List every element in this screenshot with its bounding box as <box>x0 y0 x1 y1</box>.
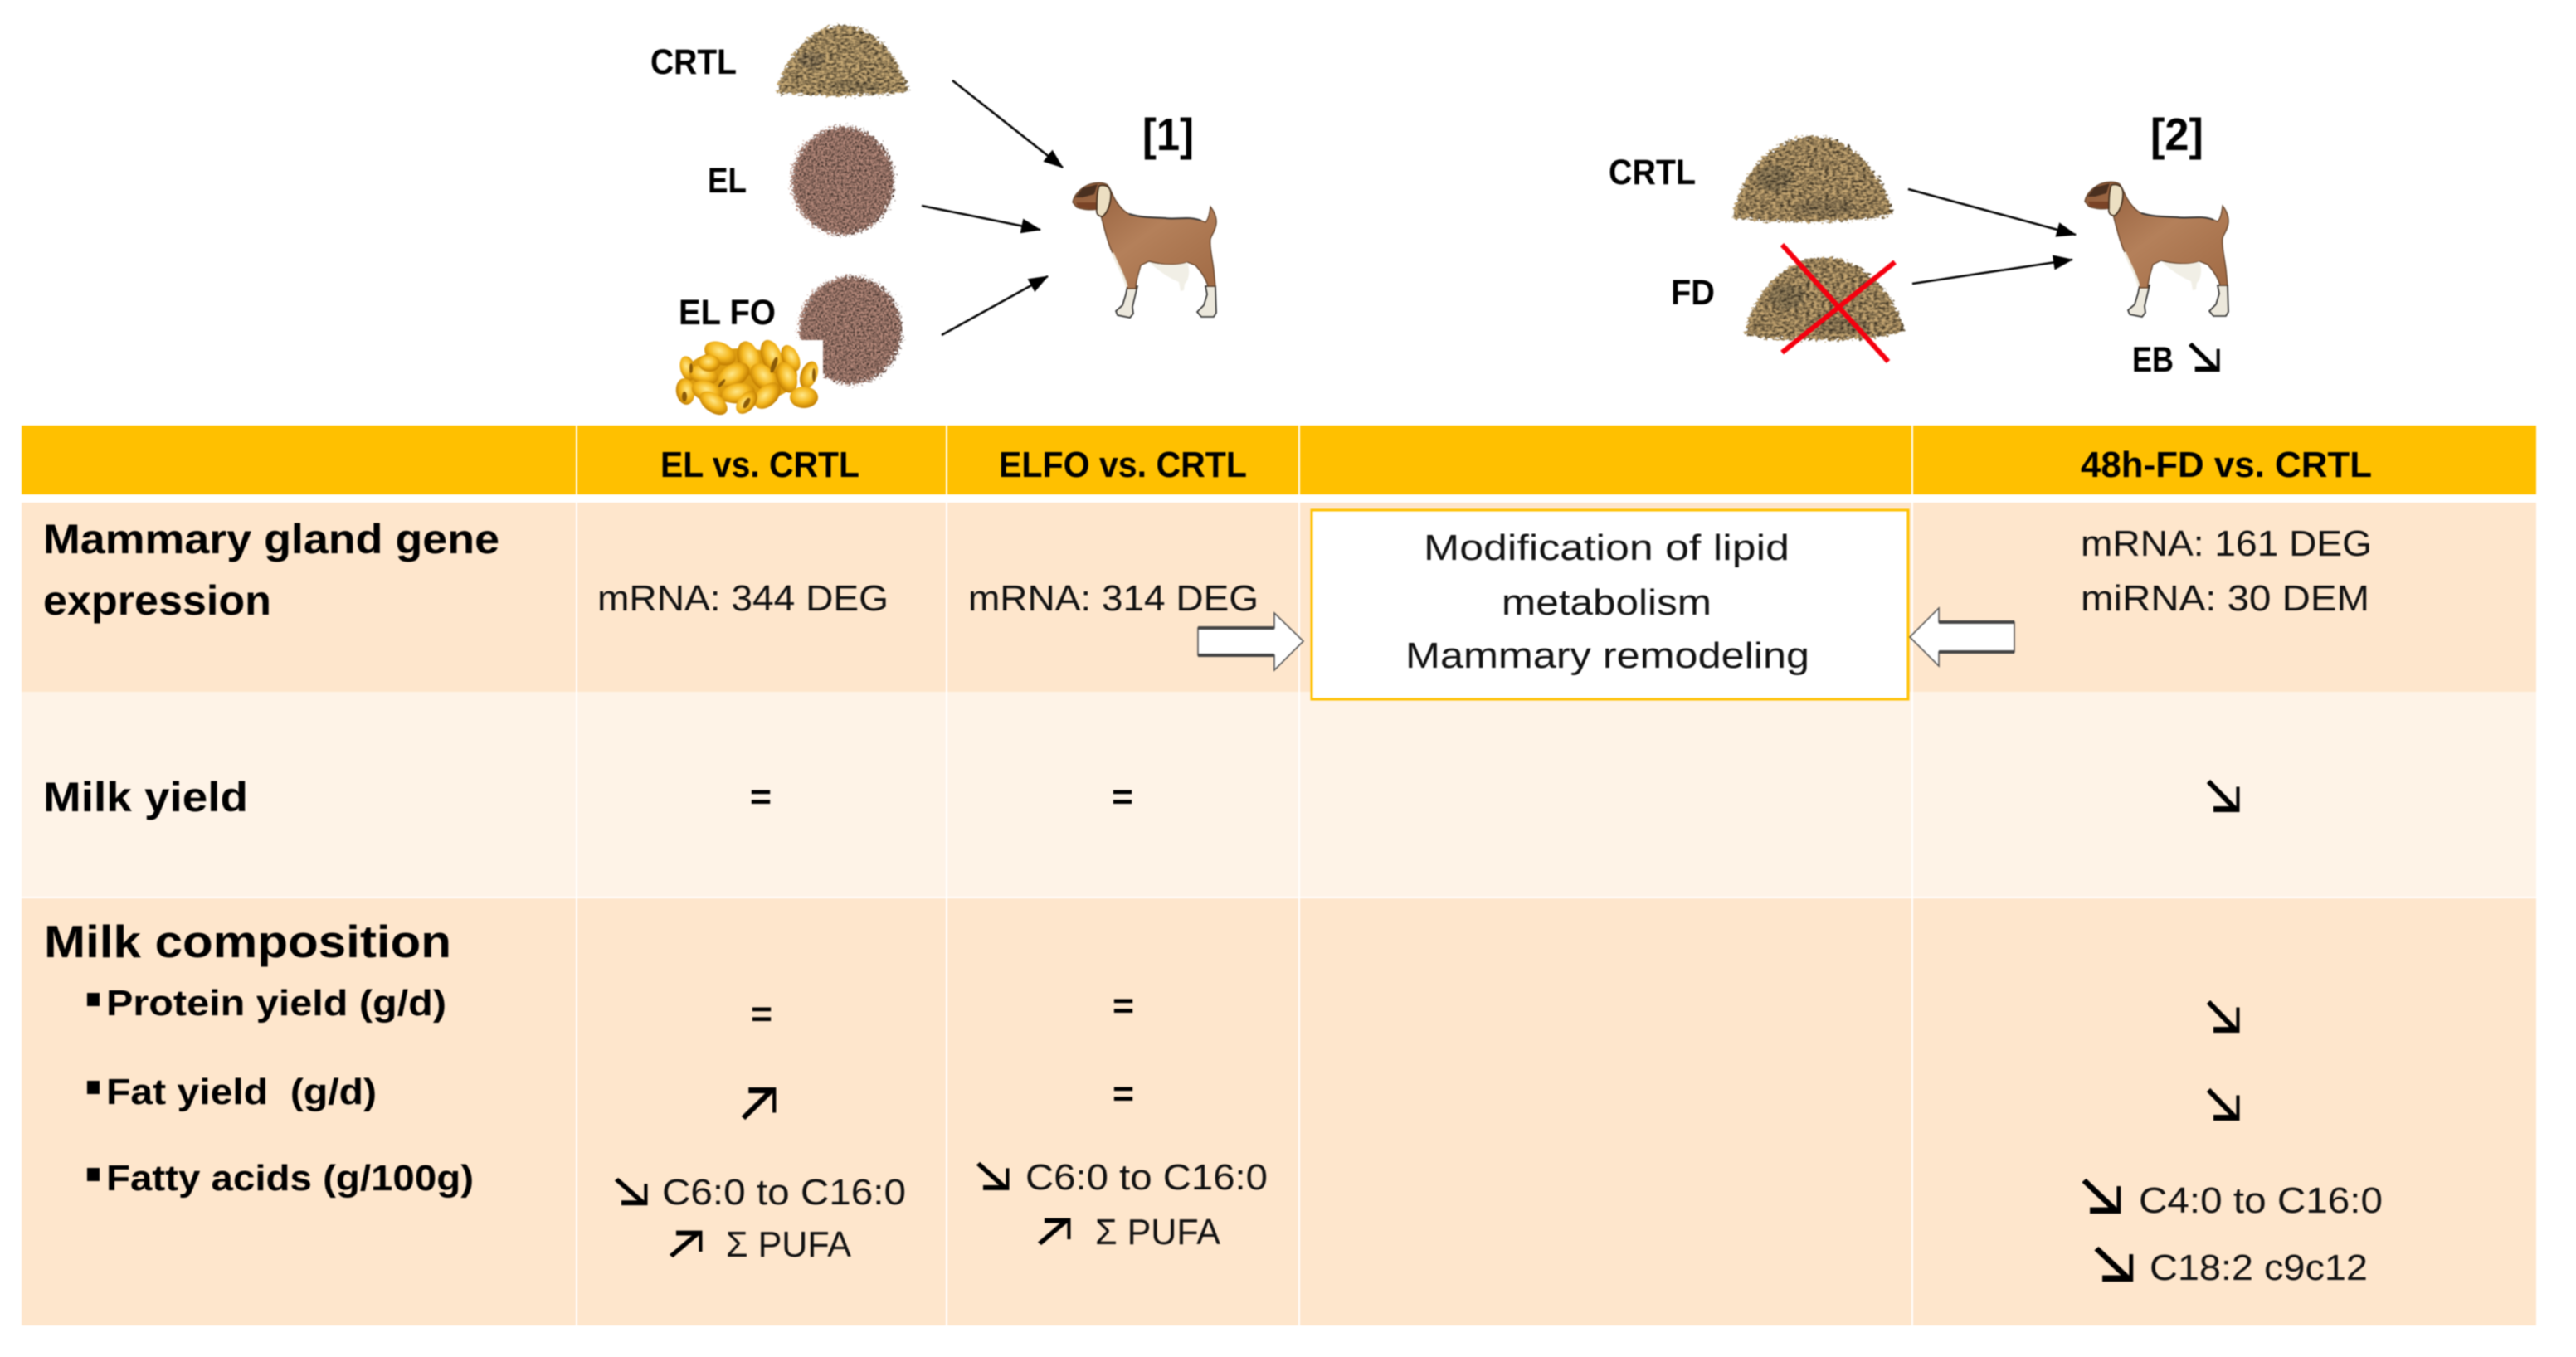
value: 48h-FD fat decrease <box>2208 1090 2240 1121</box>
value: 48h-FD protein decrease <box>2208 1002 2240 1033</box>
reference: [1]: [1] <box>1142 109 1194 160</box>
icon: fish oil capsules <box>670 337 823 420</box>
row label: milk composition: Milk composition <box>44 916 451 967</box>
icon: goat <box>1073 182 1216 318</box>
value: EL fat increase <box>743 1087 776 1118</box>
callout: lipid metabolism: Modification of lipid <box>1424 528 1790 568</box>
label: EL: EL <box>708 161 747 201</box>
icon: extruded linseed <box>791 127 894 235</box>
label: EB decrease: EB <box>2132 340 2174 380</box>
value: 48h-FD mRNA and miRNA: miRNA: 30 DEM <box>2081 578 2369 619</box>
arrow: CRTL to goat <box>1908 189 2076 235</box>
value: EL fatty acids: Σ PUFA <box>726 1224 852 1265</box>
arrow: FD to goat <box>1912 260 2072 284</box>
value: ELFO fat: = <box>1113 1073 1134 1114</box>
arrow: to callout from left <box>1198 613 1303 670</box>
callout: lipid metabolism <box>1312 510 1908 699</box>
header row <box>22 426 2536 494</box>
value: EL fatty acids: C6:0 to C16:0 <box>662 1172 906 1213</box>
value: 48h-FD fatty acids: C18:2 c9c12 <box>2150 1248 2368 1288</box>
value: ELFO milk yield: = <box>1112 776 1133 817</box>
list: fat yield: Fat yield (g/d) <box>106 1072 377 1112</box>
value: EL mRNA: mRNA: 344 DEG <box>597 578 889 619</box>
label: EL FO: EL FO <box>679 293 776 333</box>
row label: mammary gland gene expression: expression <box>43 577 271 624</box>
row: milk composition background <box>22 897 2536 1325</box>
row: mammary gland gene expression background <box>22 503 2536 692</box>
header: ELFO vs. CRTL: ELFO vs. CRTL <box>999 445 1247 485</box>
list: fatty acids: Fatty acids (g/100g) <box>106 1158 474 1199</box>
value: 48h-FD mRNA and miRNA: mRNA: 161 DEG <box>2081 523 2372 564</box>
value: ELFO mRNA: mRNA: 314 DEG <box>968 578 1259 619</box>
list: protein yield: Protein yield (g/d) <box>106 983 446 1024</box>
value: ELFO fatty acids: Σ PUFA <box>1095 1212 1221 1252</box>
header: 48h-FD vs. CRTL: 48h-FD vs. CRTL <box>2081 445 2372 485</box>
row label: mammary gland gene expression: Mammary gland gene <box>43 516 499 562</box>
reference: [2]: [2] <box>2150 109 2203 160</box>
arrow: to callout from right <box>1910 608 2014 666</box>
arrow: CRTL to goat <box>952 80 1063 168</box>
value: 48h-FD milk yield decrease <box>2208 781 2240 812</box>
row: milk yield background <box>22 692 2536 897</box>
icon: hay pile <box>777 25 908 96</box>
arrow: EL to goat <box>922 206 1040 230</box>
callout: lipid metabolism: Mammary remodeling <box>1405 635 1809 676</box>
value: ELFO protein: = <box>1113 985 1134 1026</box>
icon: hay pile <box>1732 136 1893 222</box>
table: results <box>22 426 2536 1325</box>
value: EL fatty acids <box>616 1172 906 1265</box>
value: EL milk yield: = <box>750 776 772 817</box>
value: 48h-FD mRNA and miRNA <box>2081 523 2372 619</box>
callout: lipid metabolism: metabolism <box>1502 582 1712 623</box>
icon: extruded linseed with fish oil <box>799 276 902 384</box>
value: EL protein: = <box>751 994 772 1034</box>
icon: goat <box>2085 182 2228 317</box>
value: ELFO fatty acids: C6:0 to C16:0 <box>1025 1157 1268 1198</box>
panel: diet scheme 1 <box>650 25 1216 420</box>
header: EL vs. CRTL: EL vs. CRTL <box>660 445 859 485</box>
label: CRTL: CRTL <box>1609 153 1696 192</box>
value: ELFO fatty acids <box>978 1157 1268 1252</box>
value: 48h-FD fatty acids: C4:0 to C16:0 <box>2139 1180 2383 1221</box>
label: CRTL: CRTL <box>650 42 737 82</box>
row label: mammary gland gene expression <box>43 516 499 624</box>
label: EB decrease <box>2132 340 2220 380</box>
arrow: EL FO to goat <box>942 276 1048 335</box>
row label: milk yield: Milk yield <box>43 774 248 820</box>
icon: hay pile crossed out <box>1745 245 1904 362</box>
value: 48h-FD fatty acids <box>2084 1180 2383 1288</box>
panel: diet scheme 2 <box>1609 109 2228 380</box>
label: FD: FD <box>1671 273 1715 313</box>
